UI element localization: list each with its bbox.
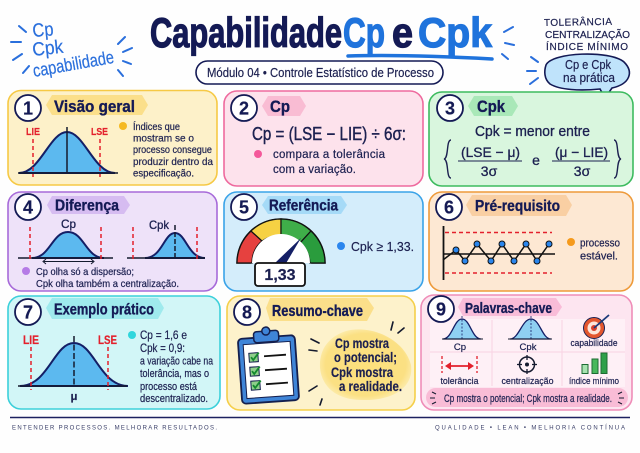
bullet text: processo [580, 238, 620, 250]
footer rule [10, 416, 630, 418]
formula: 3σ [481, 163, 498, 179]
bullet text [254, 149, 386, 176]
bullet text: processo está [140, 381, 198, 393]
title: Cp [343, 9, 385, 56]
number badge: 7 [23, 302, 33, 322]
heading chip [262, 96, 306, 116]
number badge [231, 194, 257, 220]
callout burst: Cp mostra [335, 335, 389, 351]
Cpk curve: Cpk [149, 218, 170, 232]
keyword doodle top left: capabilidade [31, 47, 115, 81]
number badge [437, 95, 463, 121]
bullet text: Cpk = 0,9: [140, 341, 185, 355]
bell curve [18, 335, 128, 403]
bullet text: Cp = 1,6 e [140, 328, 187, 342]
heading chip: Exemplo prático [54, 302, 154, 318]
heading chip: Cpk [477, 98, 506, 116]
bullet text: Cpk ≥ 1,33. [351, 239, 414, 254]
keyword: centralização: centralização [502, 376, 554, 387]
bullet text [567, 238, 620, 262]
panel 8: resumo-chave [227, 296, 415, 410]
callout burst: Cpk mostra [331, 364, 393, 380]
heading chip: Cp [270, 98, 290, 116]
bullet text: Índices que [133, 120, 180, 133]
number badge [234, 299, 260, 325]
bullet text: Cpk olha também a centralização. [36, 278, 179, 290]
bullet text: especificação. [133, 168, 194, 180]
number badge: 2 [239, 98, 249, 118]
keyword: índice mínimo [569, 353, 619, 387]
top right keywords: ÍNDICE MÍNIMO [546, 40, 628, 53]
number badge: 1 [23, 98, 33, 118]
bullet text: produzir dentro da [133, 156, 213, 168]
number badge: 9 [436, 300, 446, 320]
speech bubble [527, 54, 629, 98]
keyword: Cpk: Cpk [520, 342, 537, 353]
number badge [231, 95, 257, 121]
panel 2: Cp [224, 91, 423, 186]
keyword doodle top left [11, 19, 132, 81]
heading chip [468, 96, 518, 116]
keyword: centralização [502, 355, 554, 387]
bell curve: LIE [23, 335, 39, 347]
formula: Cpk = menor entre [475, 123, 590, 140]
number badge [15, 95, 41, 121]
heading chip: Diferença [55, 198, 119, 214]
speech bubble: Cp e Cpk [565, 58, 612, 72]
title: Cpk [418, 9, 493, 56]
panel 9: palavras-chave [421, 295, 632, 410]
panel 6: pré-requisito [429, 192, 633, 291]
formula: (μ − LIE) [555, 144, 608, 160]
number badge: 3 [445, 98, 455, 118]
heading chip: Visão geral [54, 98, 135, 116]
formula: e [532, 152, 540, 168]
number badge: 5 [239, 198, 249, 218]
formula: 3σ [574, 163, 591, 179]
bullet text: tolerância, mas o [140, 368, 209, 380]
heading chip [46, 298, 164, 319]
bullet text: compara a tolerância [273, 149, 386, 161]
bell curve: μ [71, 391, 77, 403]
keyword: tolerância: tolerância [440, 376, 479, 387]
gauge [237, 219, 325, 286]
callout burst: a realidade. [339, 378, 402, 394]
top right keywords [544, 15, 630, 53]
panel 1: visão geral [8, 90, 217, 185]
keyword: tolerância [440, 356, 479, 387]
bell curve [18, 127, 118, 177]
panel 7: exemplo prático [8, 296, 220, 409]
bullet text [119, 120, 213, 180]
heading chip: Pré-requisito [475, 198, 560, 215]
keyword doodle top left: Cpk [31, 37, 65, 61]
footer left text: ENTENDER PROCESSOS. MELHORAR RESULTADOS. [12, 426, 217, 432]
heading chip: Referência [269, 198, 338, 214]
title rays [502, 27, 514, 59]
top right keywords: CENTRALIZAÇÃO [545, 28, 630, 41]
control chart [443, 226, 555, 280]
title: e [392, 9, 413, 56]
number badge: 6 [444, 198, 454, 218]
subtitle pill [196, 61, 443, 84]
formula: (LSE − μ) [461, 144, 520, 160]
panel 5: referência [224, 192, 423, 291]
panel 3: Cpk [429, 92, 633, 186]
bullet text: Cp olha só a dispersão; [36, 266, 134, 278]
top right keywords: TOLERÂNCIA [544, 15, 612, 29]
bullet text: processo consegue [133, 144, 212, 156]
Cp curve: Cp [61, 217, 76, 231]
bullet text: com a variação. [273, 164, 356, 176]
gauge: 1,33 [264, 267, 296, 284]
keyword: Cp [442, 316, 483, 353]
keyword: Cp: Cp [454, 342, 466, 353]
keyword: índice mínimo: índice mínimo [569, 376, 619, 387]
number badge [15, 194, 41, 220]
callout burst [309, 322, 411, 405]
footer right text: QUALIDADE • LEAN • MELHORIA CONTÍNUA [435, 424, 625, 432]
Cpk curve [127, 218, 205, 262]
formula [444, 123, 621, 179]
heading chip: Palavras-chave [465, 300, 552, 317]
callout burst: o potencial; [334, 349, 397, 365]
bullet text: mostram se o [133, 132, 194, 144]
bullet text: descentralizado. [140, 393, 208, 405]
bullet text: a variação cabe na [140, 356, 214, 368]
number badge [15, 299, 41, 325]
bell curve: LSE [98, 335, 117, 347]
keyword: capabilidade: capabilidade [570, 338, 618, 349]
keyword: capabilidade [570, 315, 618, 349]
panel 4: diferença [8, 192, 217, 291]
number badge: 4 [23, 198, 33, 218]
title: Capabilidade [150, 9, 342, 56]
number badge: 8 [242, 302, 252, 322]
Cp curve [18, 217, 113, 264]
bell curve: LSE [91, 127, 108, 138]
bullet text [128, 328, 214, 405]
heading chip: Resumo-chave [272, 303, 363, 320]
formula: Cp = (LSE − LIE) ÷ 6σ: [252, 124, 406, 144]
heading chip [266, 298, 374, 321]
keyword doodle top left: Cp [32, 19, 54, 42]
number badge [428, 296, 454, 322]
bell curve: LIE [26, 127, 40, 138]
icon: clipboard checklist [237, 325, 299, 404]
keyword: Cpk [508, 316, 552, 353]
number badge [436, 194, 462, 220]
bullet text [22, 266, 179, 290]
speech bubble: na prática [563, 71, 615, 85]
summary pill [426, 388, 628, 407]
keyword grid [430, 315, 625, 387]
bullet text: estável. [580, 250, 618, 262]
subtitle pill: Módulo 04 • Controle Estatístico de Processo [207, 65, 434, 80]
